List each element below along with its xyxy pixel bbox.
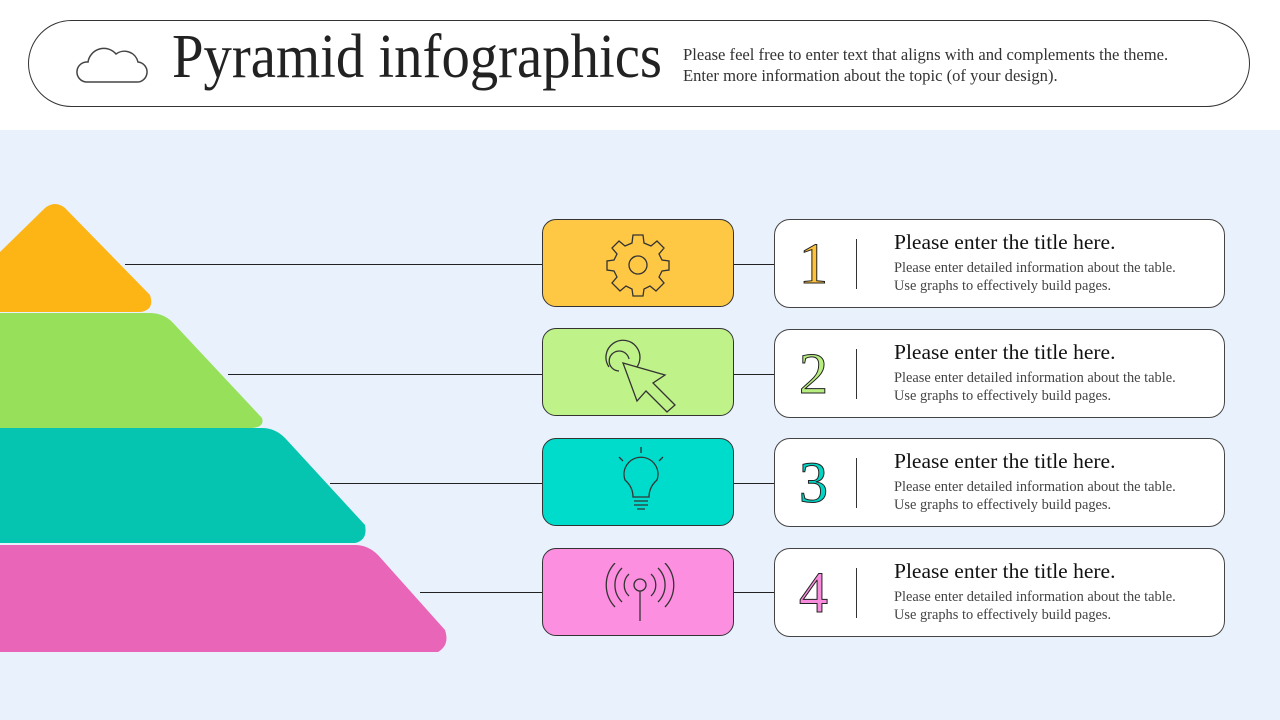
card 3 bbox=[774, 438, 1225, 527]
header pill bbox=[28, 20, 1250, 107]
icon box 1: gear bbox=[542, 219, 734, 307]
card 2: Please enter detailed information about the table. bbox=[894, 370, 1176, 386]
pyramid bbox=[0, 204, 446, 652]
card 2: Use graphs to effectively build pages. bbox=[894, 388, 1111, 404]
subtitle: Please feel free to enter text that aligns with and complements the theme. bbox=[683, 45, 1168, 64]
card 3: Use graphs to effectively build pages. bbox=[894, 497, 1111, 513]
card 4 bbox=[774, 548, 1225, 637]
card 2 bbox=[774, 329, 1225, 418]
card 4: Please enter the title here. bbox=[894, 559, 1115, 583]
card 1: Use graphs to effectively build pages. bbox=[894, 278, 1111, 294]
card 4: Please enter detailed information about the table. bbox=[894, 589, 1176, 605]
card 3: 3 bbox=[799, 450, 828, 515]
card 4: Use graphs to effectively build pages. bbox=[894, 607, 1111, 623]
icon box 2: cursor bbox=[542, 328, 734, 416]
icon: cloud bbox=[76, 48, 148, 83]
card 3: Please enter the title here. bbox=[894, 449, 1115, 473]
card 1: Please enter the title here. bbox=[894, 230, 1115, 254]
card 2: 2 bbox=[799, 341, 828, 406]
card 2: Please enter the title here. bbox=[894, 340, 1115, 364]
icon box 4: antenna bbox=[542, 548, 734, 636]
card 4: 4 bbox=[799, 560, 828, 625]
card 1: Please enter detailed information about the table. bbox=[894, 260, 1176, 276]
icon box 3: bulb bbox=[542, 438, 734, 526]
card 1: 1 bbox=[799, 231, 828, 296]
header band bbox=[0, 0, 1280, 130]
connector lines bbox=[125, 264, 542, 265]
subtitle: Enter more information about the topic (of your design). bbox=[683, 66, 1058, 85]
title: Pyramid infographics bbox=[172, 23, 662, 91]
subtitle bbox=[683, 45, 1168, 85]
card 3: Please enter detailed information about the table. bbox=[894, 479, 1176, 495]
card 1 bbox=[774, 219, 1225, 308]
